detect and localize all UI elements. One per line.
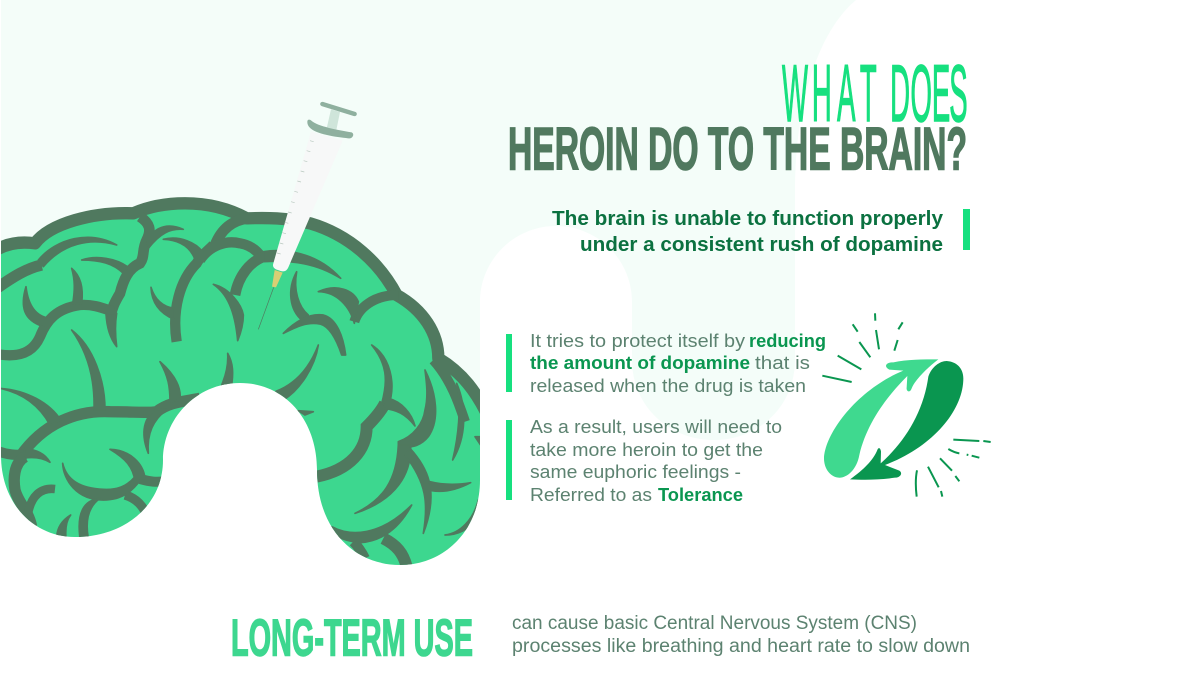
paragraph: protection: the amount of dopamine xyxy=(530,353,750,373)
illustration: brain xyxy=(1,197,480,565)
paragraph: tolerance xyxy=(530,417,782,505)
paragraph accent bar 2 xyxy=(506,420,512,500)
paragraph: long-term effects: can cause basic Central Nervous System (CNS) xyxy=(512,613,917,634)
heading: long-term use: LONG-TERM USE xyxy=(231,610,473,668)
dark arrow xyxy=(850,361,963,480)
subheading accent bar xyxy=(963,209,970,250)
syringe flange xyxy=(307,120,353,138)
paragraph: protection: reducing xyxy=(749,331,826,351)
paragraph accent bar 1 xyxy=(506,334,512,392)
paragraph: tolerance: Tolerance xyxy=(658,485,743,505)
syringe body xyxy=(273,132,343,271)
title: what does: WHAT DOES xyxy=(782,47,968,138)
paragraph: tolerance: As a result, users will need to xyxy=(530,417,782,437)
radiating ticks xyxy=(822,313,991,497)
paragraph: protection xyxy=(530,331,826,396)
paragraph: tolerance: take more heroin to get the xyxy=(530,440,763,460)
paragraph: tolerance: same euphoric feelings - xyxy=(530,462,741,482)
paragraph: protection: It tries to protect itself by xyxy=(530,331,745,351)
illustration: syringe xyxy=(258,104,355,329)
needle hub xyxy=(272,270,283,287)
subheading: The brain is unable to function properly xyxy=(552,208,944,230)
background shape xyxy=(1,0,856,565)
paragraph: long-term effects xyxy=(512,613,970,657)
scale ticks xyxy=(277,141,314,254)
subheading xyxy=(552,208,944,256)
subheading: under a consistent rush of dopamine xyxy=(580,234,943,256)
paragraph: protection: released when the drug is taken xyxy=(530,376,806,396)
needle xyxy=(258,287,274,329)
paragraph: tolerance: Referred to as xyxy=(530,485,652,505)
paragraph: protection: that is xyxy=(755,353,810,373)
paragraph: long-term effects: processes like breathing and heart rate to slow down xyxy=(512,636,970,657)
plunger thumb rest xyxy=(322,104,355,114)
light arrow xyxy=(824,359,938,478)
plunger rod xyxy=(327,109,340,132)
infographic xyxy=(1,0,991,657)
icon: cycling arrows xyxy=(822,313,991,497)
